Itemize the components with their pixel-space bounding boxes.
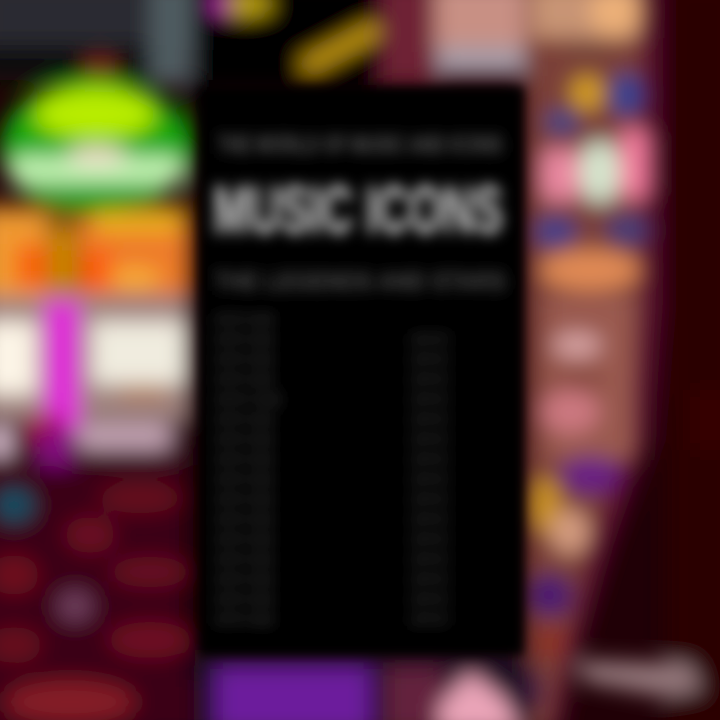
- list: left column: [214, 312, 282, 629]
- icon: white panels: [0, 322, 184, 456]
- list: left column: ARTIST NAME: [214, 452, 274, 469]
- list: left column: ARTIST NAME: [214, 572, 274, 589]
- icon: dark red seats: [0, 483, 192, 720]
- list: left column: ARTIST NAME: [214, 512, 274, 529]
- icon: green dome: [0, 58, 190, 212]
- panel: right artwork column: [522, 0, 720, 720]
- panel: centre black text panel: [199, 87, 523, 655]
- list: left column: ARTIST NAME: [214, 592, 274, 609]
- list: left column: ARTIST NAME: [214, 432, 274, 449]
- list: right column: ARTIST: [410, 332, 450, 349]
- list: right column: [410, 332, 450, 629]
- list: left column: ARTIST NAME: [214, 312, 274, 329]
- icon: right curtain: [665, 0, 720, 720]
- list: right column: ARTIST: [410, 432, 450, 449]
- list: right column: ARTIST: [410, 612, 450, 629]
- list: right column: ARTIST: [410, 372, 450, 389]
- subtitle: THE LEGENDS AND STARS: [214, 266, 506, 296]
- list: right column: ARTIST: [410, 472, 450, 489]
- list: left column: ARTIST NAME: [214, 392, 282, 409]
- list: left column: ARTIST NAME: [214, 412, 274, 429]
- list: right column: ARTIST: [410, 452, 450, 469]
- panel: bottom centre artwork: [195, 650, 530, 720]
- list: left column: ARTIST NAME: [214, 372, 274, 389]
- list: right column: ARTIST: [410, 512, 450, 529]
- list: right column: ARTIST: [410, 492, 450, 509]
- icon: orange band: [0, 212, 186, 296]
- title: MUSIC ICONS: [213, 172, 503, 248]
- list: right column: ARTIST: [410, 532, 450, 549]
- panel: top centre artwork: [195, 0, 535, 90]
- list: right column: ARTIST: [410, 352, 450, 369]
- heading: kicker line: THE WORLD OF MUSIC AND ICONS: [218, 131, 502, 159]
- list: right column: ARTIST: [410, 572, 450, 589]
- icon: mask face: [534, 74, 648, 247]
- list: left column: ARTIST NAME: [214, 492, 274, 509]
- icon: magenta bar: [28, 300, 80, 466]
- panel: left artwork column: [0, 0, 200, 720]
- list: left column: ARTIST NAME: [214, 532, 274, 549]
- list: left column: ARTIST NAME: [214, 332, 274, 349]
- list: left column: ARTIST NAME: [214, 472, 274, 489]
- list: right column: ARTIST: [410, 392, 450, 409]
- logo text: [576, 660, 702, 696]
- list: right column: ARTIST: [410, 552, 450, 569]
- icon: lower face: [522, 250, 640, 710]
- list: left column: ARTIST NAME: [214, 612, 274, 629]
- list: left column: ARTIST NAME: [214, 552, 274, 569]
- list: right column: ARTIST: [410, 592, 450, 609]
- list: right column: ARTIST: [410, 412, 450, 429]
- list: left column: ARTIST NAME: [214, 352, 274, 369]
